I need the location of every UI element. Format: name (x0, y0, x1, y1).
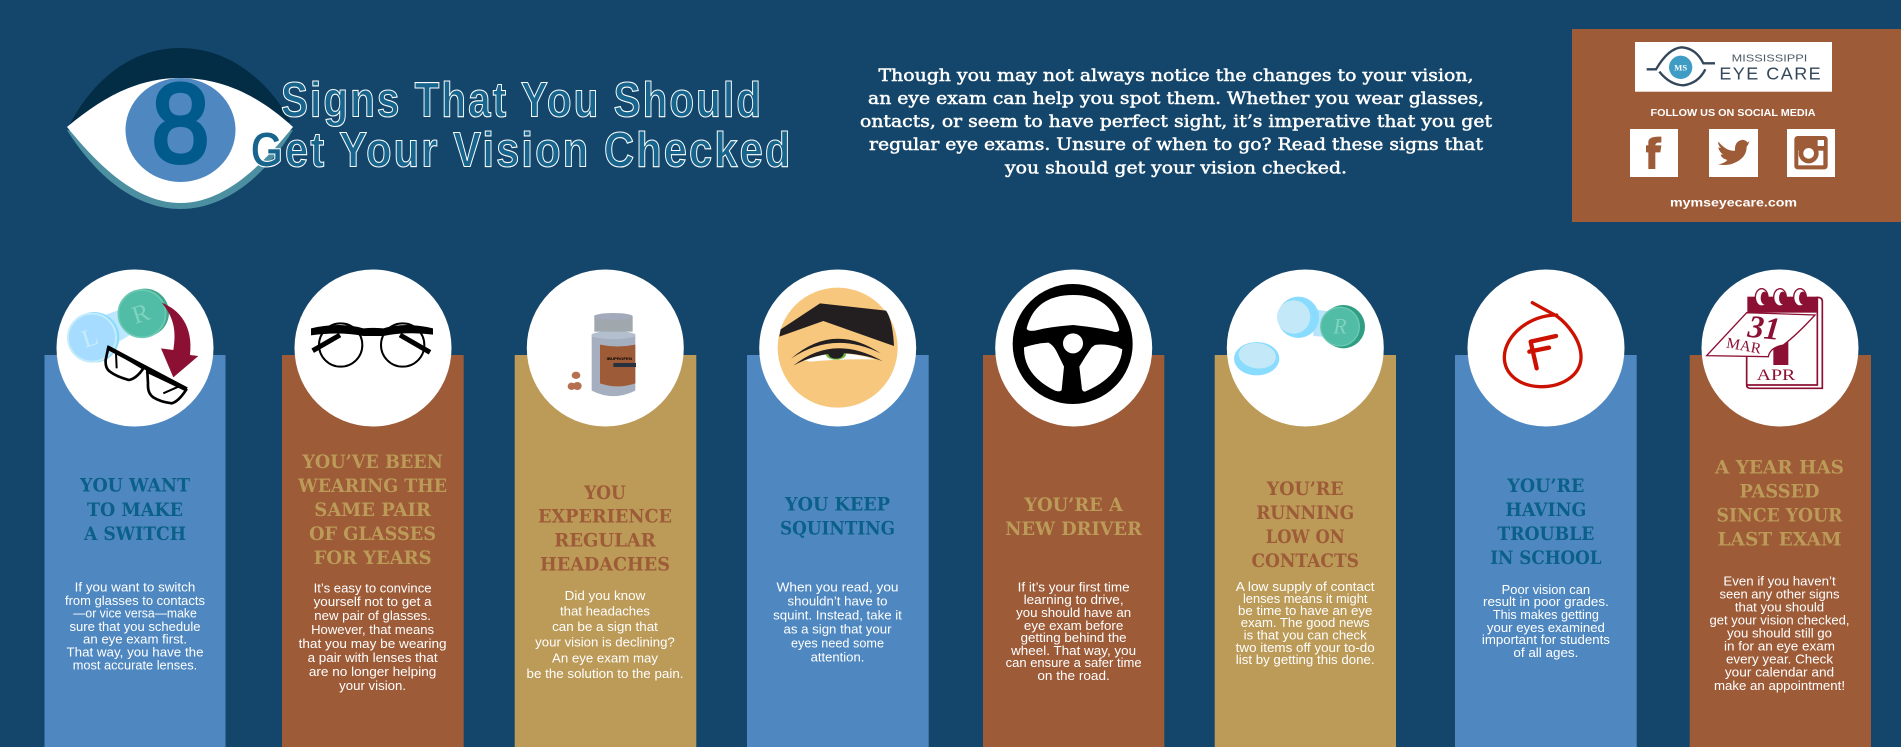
body text: list by getting this done. (1236, 652, 1375, 667)
panel: sign 3, regular headaches (515, 270, 696, 747)
body text: on the road. (1037, 668, 1110, 683)
body text: be time to have an eye (1238, 603, 1372, 618)
panel: sign 2, same pair of glasses (282, 270, 464, 747)
logo (1635, 42, 1832, 92)
heading: TROUBLE (1497, 523, 1594, 545)
body text (65, 580, 205, 673)
heading: YOU (583, 482, 626, 504)
icon: eye with number 8: 8 (152, 61, 210, 186)
social heading: FOLLOW US ON SOCIAL MEDIA (1650, 107, 1816, 119)
heading: IN SCHOOL (1490, 547, 1602, 569)
icon: steering wheel (1013, 284, 1133, 404)
body text (1006, 580, 1142, 683)
heading: PASSED (1740, 480, 1820, 502)
body text: an eye exam first. (83, 632, 187, 647)
heading (1005, 494, 1142, 540)
body text: sure that you schedule (70, 619, 200, 634)
body text (299, 580, 447, 693)
heading: LOW ON (1266, 526, 1345, 548)
body text: wheel. That way, you (1010, 643, 1136, 658)
body text: that headaches (560, 603, 651, 618)
body text: A low supply of contact (1236, 579, 1375, 594)
body text: your vision is declining? (535, 635, 675, 650)
heading (538, 482, 672, 576)
body text: shouldn’t have to (788, 594, 888, 609)
body text: squint. Instead, take it (773, 608, 902, 623)
body text: is that you can check (1244, 628, 1367, 643)
logo: EYE CARE (1719, 63, 1821, 83)
panel: sign 4, you keep squinting (747, 270, 929, 747)
body text: Even if you haven’t (1723, 574, 1836, 589)
body text: most accurate lenses. (73, 658, 197, 673)
panel: social media (1572, 29, 1901, 222)
icon: calendar: APR (1757, 367, 1796, 384)
body text: your eyes examined (1487, 620, 1605, 635)
heading: NEW DRIVER (1005, 518, 1142, 540)
intro text (860, 66, 1492, 179)
intro text: you should get your vision checked. (1004, 159, 1347, 179)
panel: sign 7, trouble in school (1455, 270, 1637, 747)
body text: eye exam before (1024, 618, 1123, 633)
icon: glasses (311, 323, 433, 367)
body text (526, 588, 684, 681)
icon: contacts to glasses swap: R (129, 298, 153, 330)
heading: YOU’RE A (1023, 494, 1123, 516)
title: Signs That You Should (281, 74, 763, 128)
body text: you should have an (1016, 605, 1131, 620)
body text: An eye exam may (552, 650, 659, 665)
heading: YOU’RE (1506, 475, 1584, 497)
body text: that you should (1735, 600, 1824, 615)
heading: SQUINTING (780, 518, 895, 540)
icon: contacts to glasses swap: L (78, 322, 102, 354)
body text: your vision. (339, 678, 406, 693)
heading: A SWITCH (83, 523, 186, 545)
body text: as a sign that your (784, 622, 892, 637)
heading: YOU’RE (1266, 478, 1344, 500)
title (250, 74, 792, 178)
icon: eye with number 8 (67, 48, 293, 209)
body text: a pair with lenses that (308, 650, 438, 665)
body text: you should still go (1727, 626, 1832, 641)
body text: It’s easy to convince (314, 580, 432, 595)
website: mymseyecare.com (1670, 196, 1797, 210)
icon: contacts to glasses swap (68, 289, 198, 403)
body text: When you read, you (776, 580, 898, 595)
intro text: an eye exam can help you spot them. Whether you wear glasses, (868, 89, 1484, 109)
body text: are no longer helping (309, 664, 436, 679)
body text: make an appointment! (1714, 678, 1845, 693)
body text: This makes getting (1493, 607, 1599, 622)
body text: However, that means (311, 622, 435, 637)
heading (1251, 478, 1359, 572)
icon: calendar: MAR (1725, 335, 1763, 358)
icon: calendar (1707, 289, 1822, 388)
heading: OF GLASSES (309, 523, 436, 545)
heading: WEARING THE (297, 475, 447, 497)
panel: sign 5, new driver (983, 270, 1164, 747)
body text (1236, 579, 1375, 667)
heading: HAVING (1505, 499, 1586, 521)
icon: facebook (1630, 129, 1678, 177)
panel: sign 1, you want to make a switch (44, 270, 226, 747)
heading: LAST EXAM (1718, 529, 1842, 551)
icon: failing grade F (1504, 303, 1581, 387)
icon: twitter (1709, 129, 1758, 177)
intro text: ontacts, or seem to have perfect sight, it’s imperative that you get (860, 112, 1492, 132)
body text: eyes need some (791, 636, 884, 651)
heading (79, 475, 190, 545)
body text: seen any other signs (1720, 587, 1840, 602)
body text: important for students (1482, 632, 1610, 647)
body text: in for an eye exam (1724, 639, 1835, 654)
panel: sign 6, running low on contacts (1215, 270, 1396, 747)
body text: from glasses to contacts (65, 593, 205, 608)
body text: Poor vision can (1502, 582, 1590, 597)
heading: YOU’VE BEEN (301, 451, 443, 473)
body text: yourself not to get a (314, 594, 432, 609)
icon: squinting eye (778, 288, 898, 408)
body text: get your vision checked, (1710, 613, 1850, 628)
logo: MS (1674, 62, 1687, 72)
body text: attention. (811, 650, 864, 665)
body text: can ensure a safer time (1006, 655, 1142, 670)
body text: If it’s your first time (1018, 580, 1130, 595)
heading: REGULAR (554, 530, 656, 552)
body text: new pair of glasses. (314, 608, 431, 623)
body text (773, 580, 902, 665)
body text: If you want to switch (75, 580, 195, 595)
body text: learning to drive, (1024, 592, 1124, 607)
body text: lenses means it might (1243, 591, 1368, 606)
body text (1710, 574, 1850, 693)
body text: be the solution to the pain. (526, 666, 684, 681)
heading: SINCE YOUR (1716, 505, 1843, 527)
body text: Did you know (565, 588, 646, 603)
heading: FOR YEARS (314, 547, 432, 569)
body text: result in poor grades. (1483, 594, 1609, 609)
icon: contact lens case (1234, 297, 1365, 375)
body text: your calendar and (1725, 665, 1834, 680)
heading: HEADACHES (540, 554, 670, 576)
heading: A YEAR HAS (1714, 456, 1844, 478)
icon: calendar: 31 (1745, 308, 1782, 347)
heading: CONTACTS (1251, 550, 1359, 572)
intro text: regular eye exams. Unsure of when to go? Read these signs that (869, 135, 1483, 155)
body text: that you may be wearing (299, 636, 447, 651)
heading (1714, 456, 1844, 551)
body text: getting behind the (1021, 630, 1127, 645)
heading (1490, 475, 1602, 569)
heading: EXPERIENCE (538, 506, 672, 528)
heading: YOU WANT (79, 475, 190, 497)
body text: of all ages. (1513, 645, 1578, 660)
heading (297, 451, 447, 569)
title: Get Your Vision Checked (250, 124, 792, 178)
panel: sign 8, a year has passed (1690, 270, 1871, 747)
logo: MISSISSIPPI (1732, 54, 1807, 65)
heading (780, 494, 895, 540)
icon: contact lens case: R (1332, 313, 1347, 338)
body text: two items off your to-do (1236, 640, 1375, 655)
heading: TO MAKE (87, 499, 183, 521)
body text: —or vice versa—make (73, 606, 197, 621)
body text: every year. Check (1726, 652, 1834, 667)
icon: pill bottle: IBUPROFEN (607, 356, 632, 361)
body text: exam. The good news (1241, 615, 1370, 630)
body text: can be a sign that (552, 619, 658, 634)
heading: SAME PAIR (314, 499, 431, 521)
intro text: Though you may not always notice the changes to your vision, (878, 66, 1474, 86)
heading: YOU KEEP (784, 494, 890, 516)
heading: RUNNING (1256, 502, 1354, 524)
body text: That way, you have the (66, 645, 204, 660)
icon: instagram (1787, 129, 1835, 177)
icon: pill bottle (568, 313, 636, 396)
body text (1482, 582, 1610, 660)
